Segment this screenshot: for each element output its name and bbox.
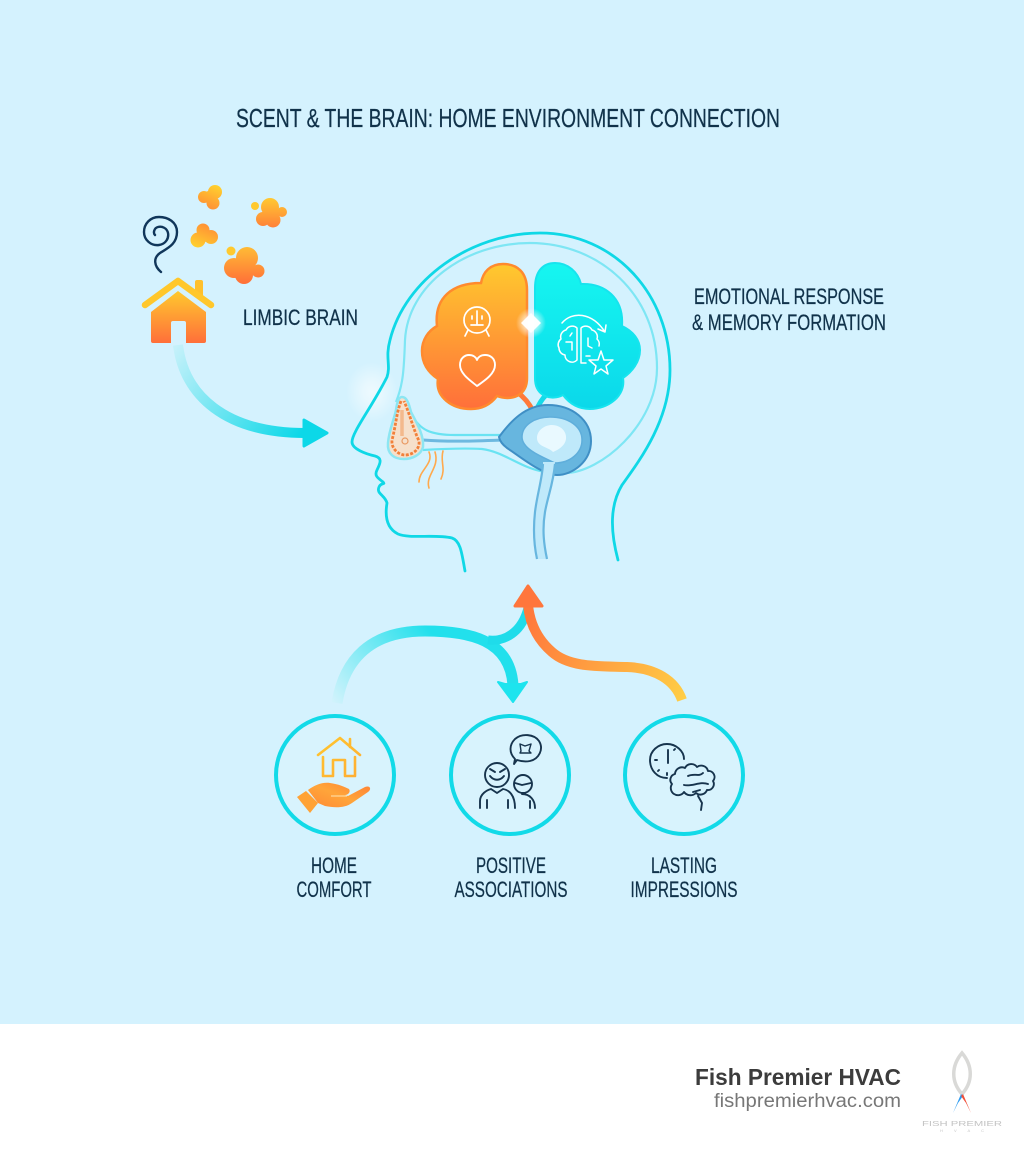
icon: scent cloud 1 — [198, 185, 222, 210]
circle outline — [276, 716, 394, 834]
connector orange — [517, 392, 533, 411]
label: emotional response and memory formation: & MEMORY FORMATION — [692, 310, 886, 335]
logo: fish premier: H V A C — [940, 1128, 984, 1133]
item: positive associations — [451, 716, 569, 902]
label: home comfort: COMFORT — [296, 877, 372, 902]
logo: fish premier: FISH PREMIER — [922, 1121, 1002, 1128]
olfactory nerve — [423, 440, 502, 441]
label: positive associations — [454, 853, 568, 902]
icon: house — [145, 280, 211, 343]
icon: scent cloud 4 — [224, 247, 264, 284]
icon: home with scent clouds — [144, 185, 287, 343]
label: limbic brain: LIMBIC BRAIN — [243, 305, 358, 330]
head outline — [352, 233, 670, 571]
circle outline — [451, 716, 569, 834]
inner brain cavity — [396, 243, 657, 473]
icon: gauge — [464, 307, 490, 336]
item: lasting impressions — [625, 716, 743, 902]
label: home comfort: HOME — [311, 853, 357, 878]
footer panel — [0, 1024, 1024, 1154]
scent waves — [419, 451, 443, 488]
right brain hemisphere — [535, 263, 640, 409]
connector cyan — [536, 395, 546, 411]
arrow: home to nose — [178, 345, 327, 446]
label: lasting impressions: IMPRESSIONS — [630, 877, 738, 902]
circle outline — [625, 716, 743, 834]
limbic structure — [499, 405, 591, 475]
footer brand text: Fish Premier HVAC — [695, 1064, 901, 1090]
footer brand text: fishpremierhvac.com — [714, 1091, 901, 1112]
arrow: home comfort to positive associations and up — [337, 608, 528, 703]
icon: brain with star — [558, 315, 613, 374]
icon: scent cloud 2 dot — [251, 202, 259, 210]
icon: scent cloud 4 dot — [226, 246, 236, 256]
label: emotional response and memory formation: EMOTIONAL RESPONSE — [694, 284, 884, 309]
label: positive associations: POSITIVE — [476, 853, 546, 878]
nose glow — [346, 362, 398, 422]
label: emotional response and memory formation — [692, 284, 886, 335]
brain stem — [534, 462, 555, 559]
diagram: head and limbic brain — [346, 233, 670, 571]
nasal passage upper — [411, 414, 502, 435]
icon: heart — [460, 355, 495, 386]
label: positive associations: ASSOCIATIONS — [454, 877, 568, 902]
title: SCENT & THE BRAIN: HOME ENVIRONMENT CONNECTION — [236, 103, 780, 133]
icon: people with speech bubble — [480, 735, 541, 808]
logo: fish premier — [922, 1053, 1002, 1133]
icon: scent cloud 3 — [190, 224, 218, 248]
nasal passage lower — [423, 449, 545, 472]
icon: scent cloud 2 — [256, 198, 287, 228]
icon: clock and brain — [650, 744, 715, 810]
arrow: lasting impressions up to head — [515, 586, 682, 700]
left brain hemisphere — [422, 264, 527, 409]
item: home comfort — [276, 716, 394, 902]
label: lasting impressions: LASTING — [651, 853, 717, 878]
icon: hand holding house — [297, 738, 370, 813]
hemisphere spark — [516, 308, 546, 338]
label: lasting impressions — [630, 853, 738, 902]
olfactory bulb — [388, 397, 423, 459]
icon: scent swirl — [144, 217, 177, 272]
label: home comfort — [296, 853, 372, 902]
footer brand text — [695, 1064, 901, 1112]
